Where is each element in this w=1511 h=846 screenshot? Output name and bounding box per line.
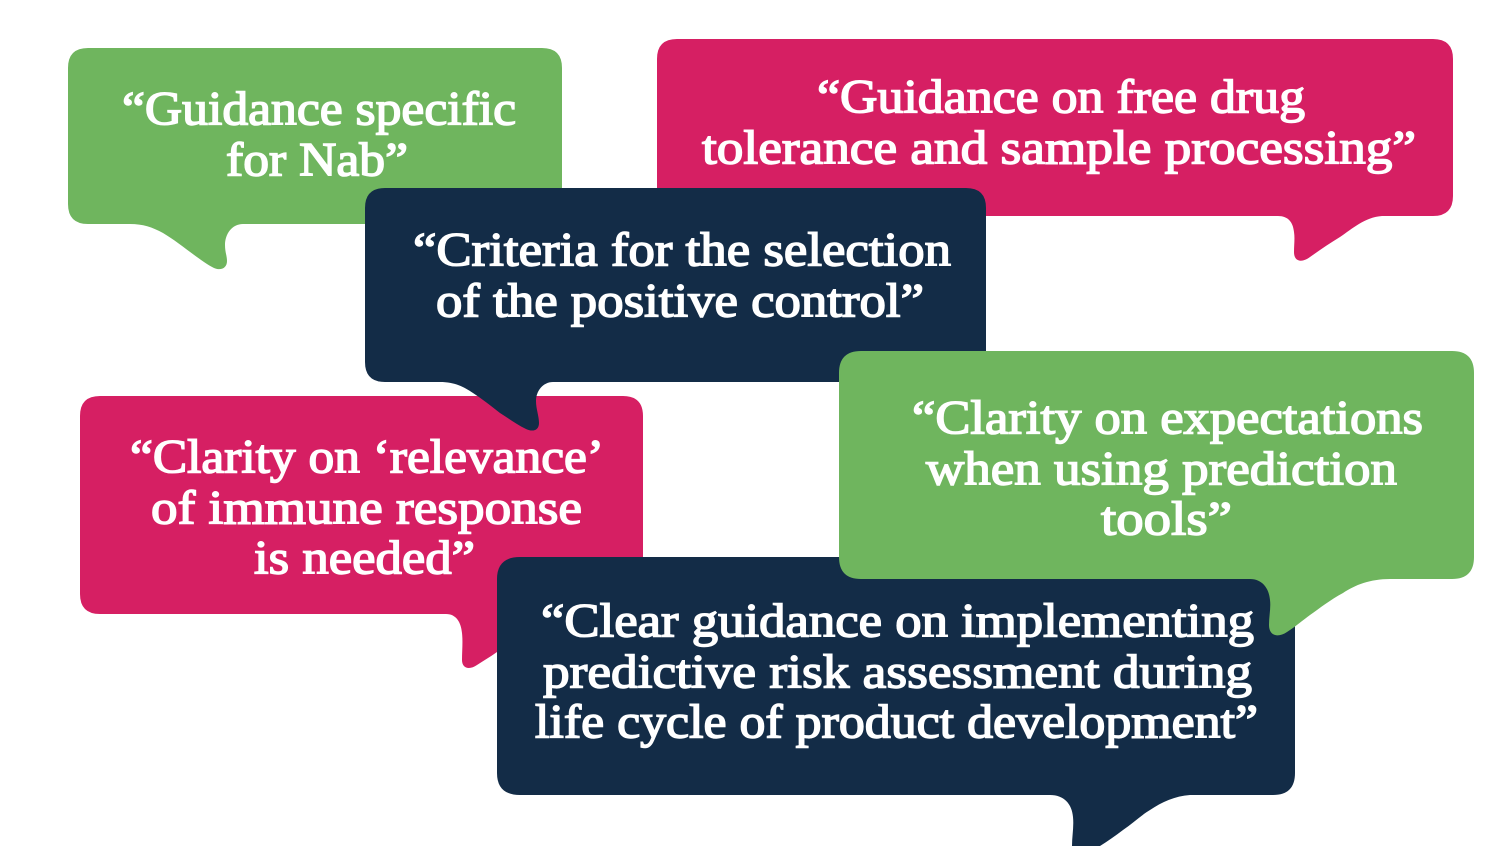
speech bubble: prediction tools expectations (839, 351, 1474, 635)
speech bubble: guidance specific for Nab (68, 48, 562, 269)
speech bubble: predictive risk assessment guidance (497, 557, 1295, 846)
speech bubble: guidance specific for Nab: for Nab” (226, 134, 408, 186)
speech bubble: relevance of immune response (80, 396, 643, 668)
speech bubble: free drug tolerance: “Guidance on free drug (817, 70, 1305, 124)
speech bubble: free drug tolerance: tolerance and sample processing” (702, 122, 1416, 174)
speech bubble: prediction tools expectations: tools” (1101, 492, 1232, 546)
speech bubble: guidance specific for Nab: “Guidance specific (122, 82, 516, 136)
speech bubble: prediction tools expectations: when using prediction (926, 442, 1397, 496)
speech bubble: relevance of immune response: is needed” (254, 532, 475, 584)
speech bubble: prediction tools expectations: “Clarity on expectations (912, 392, 1423, 444)
speech bubble: relevance of immune response: “Clarity on ‘relevance’ (130, 430, 604, 484)
speech bubble: free drug tolerance (657, 39, 1453, 261)
speech bubble: positive control criteria: of the positive control” (436, 274, 924, 328)
speech bubble: positive control criteria (365, 188, 986, 431)
speech bubble: positive control criteria: “Criteria for the selection (413, 224, 951, 276)
speech bubble: predictive risk assessment guidance: life cycle of product development” (535, 696, 1258, 748)
speech bubble: predictive risk assessment guidance: “Clear guidance on implementing (541, 594, 1254, 648)
speech bubble: relevance of immune response: of immune response (151, 482, 582, 534)
speech bubble: predictive risk assessment guidance: predictive risk assessment during (543, 646, 1252, 698)
